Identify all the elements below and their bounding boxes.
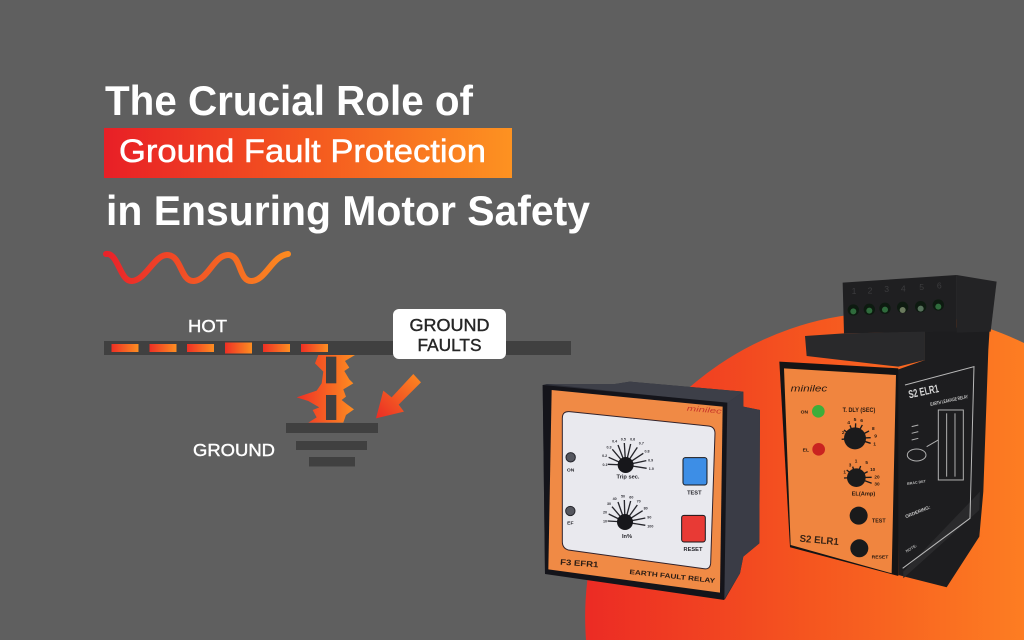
- model label: S2 ELR1: [799, 534, 840, 548]
- delay dial: 1: [873, 442, 876, 448]
- current dial: [843, 459, 880, 498]
- arrow to ground: [376, 374, 421, 418]
- trip dial: 0.9: [648, 459, 653, 463]
- delay dial: [842, 408, 877, 449]
- front frame: [779, 362, 898, 576]
- ground fault diagram: [104, 309, 571, 466]
- delay dial: 5: [854, 417, 857, 423]
- orange circle backdrop: [585, 312, 1024, 640]
- current dial: 30: [874, 481, 880, 486]
- reset knob: [850, 539, 888, 560]
- el led: [803, 443, 825, 456]
- terminal block: 5: [919, 282, 924, 292]
- terminal block: 3: [884, 284, 889, 294]
- current dial: 3: [849, 463, 852, 468]
- percent dial: 80: [644, 506, 648, 510]
- delay dial: 6: [860, 418, 863, 424]
- white panel: [562, 412, 715, 569]
- trip dial: 0.6: [630, 438, 635, 442]
- terminal block: 2: [868, 285, 873, 295]
- decorative wave: [106, 254, 288, 281]
- percent dial: [603, 495, 653, 540]
- delay dial: 4: [847, 420, 850, 426]
- product label: EARTH FAULT RELAY: [629, 569, 716, 585]
- percent dial: 90: [647, 516, 651, 520]
- test button: TEST: [687, 490, 702, 496]
- title line 3: in Ensuring Motor Safety: [106, 187, 591, 234]
- brand: minilec: [791, 384, 828, 394]
- trip dial: 0.3: [606, 446, 612, 450]
- delay dial: T. DLY (SEC): [843, 408, 875, 414]
- terminal block: [843, 275, 957, 333]
- current dial: 1: [843, 469, 846, 474]
- ground faults callout: [393, 309, 506, 359]
- ground symbol: [286, 423, 378, 466]
- step block: [805, 332, 925, 367]
- trip dial: 1.0: [649, 467, 654, 471]
- current dial: 5: [865, 460, 868, 465]
- current dial: 1: [855, 459, 858, 464]
- delay dial: 9: [874, 434, 877, 440]
- hot wire: [104, 341, 571, 355]
- test knob: TEST: [872, 518, 886, 524]
- title highlight bar: Ground Fault Protection: [119, 133, 486, 169]
- percent dial: 60: [629, 495, 633, 499]
- relay: F3 EFR1: [543, 382, 760, 600]
- title: [104, 77, 591, 234]
- ef indicator: [566, 506, 575, 527]
- relay housing: [543, 382, 760, 599]
- trip dial: Trip sec.: [617, 475, 640, 481]
- percent dial: 30: [607, 502, 611, 506]
- trip dial: [602, 438, 654, 481]
- trip dial: 0.7: [639, 442, 644, 446]
- percent dial: 50: [621, 495, 625, 499]
- percent dial: In%: [622, 534, 632, 540]
- fault arc: [297, 355, 355, 423]
- current dial: EL(Amp): [852, 492, 875, 498]
- side printed panel: S2 ELR1: [907, 383, 940, 401]
- on led: ON: [801, 410, 809, 416]
- on indicator: ON: [567, 467, 575, 473]
- trip dial: 0.4: [612, 439, 618, 443]
- brand: minilec: [686, 404, 723, 416]
- percent dial: 20: [603, 511, 607, 515]
- percent dial: 10: [603, 519, 607, 523]
- reset button: [682, 515, 705, 553]
- on indicator: [566, 453, 575, 473]
- delay dial: 8: [872, 426, 875, 432]
- el led: EL: [803, 447, 809, 453]
- orange faceplate: [784, 368, 896, 573]
- terminal block: 6: [937, 281, 942, 291]
- terminal block: 4: [901, 283, 906, 293]
- current dial: 10: [870, 467, 876, 472]
- side printed panel: BRAC DET: [907, 479, 927, 486]
- percent dial: 70: [637, 499, 641, 503]
- delay dial: 2: [842, 430, 845, 436]
- test knob: [850, 507, 886, 525]
- model label: F3 EFR1: [560, 558, 599, 569]
- percent dial: 100: [647, 525, 653, 529]
- ground faults callout: GROUND: [410, 315, 490, 335]
- side printed panel: [903, 367, 974, 568]
- ground label: GROUND: [193, 440, 275, 460]
- title highlight bar: [104, 128, 512, 178]
- hot label: HOT: [188, 316, 227, 336]
- on led: [801, 405, 825, 418]
- side printed panel: EARTH LEAKAGE RELAY: [930, 394, 969, 408]
- side printed panel: NOTE:: [905, 543, 918, 554]
- housing side: [897, 323, 990, 587]
- relay: S2 ELR1: [779, 275, 997, 587]
- terminal block: 1: [852, 286, 857, 296]
- reset button: RESET: [684, 547, 703, 553]
- reset knob: RESET: [872, 554, 888, 560]
- orange faceplate: [548, 390, 723, 593]
- title line 1: The Crucial Role of: [105, 77, 474, 124]
- trip dial: 0.8: [644, 450, 650, 454]
- current dial: 20: [874, 474, 880, 479]
- test button: [683, 458, 707, 496]
- trip dial: 0.2: [602, 454, 607, 458]
- ground faults callout: FAULTS: [418, 335, 482, 355]
- ef indicator: EF: [567, 521, 574, 527]
- side printed panel: ORDERING:: [904, 504, 931, 519]
- percent dial: 40: [613, 497, 617, 501]
- trip dial: 0.5: [621, 438, 626, 442]
- trip dial: 0.1: [602, 463, 608, 467]
